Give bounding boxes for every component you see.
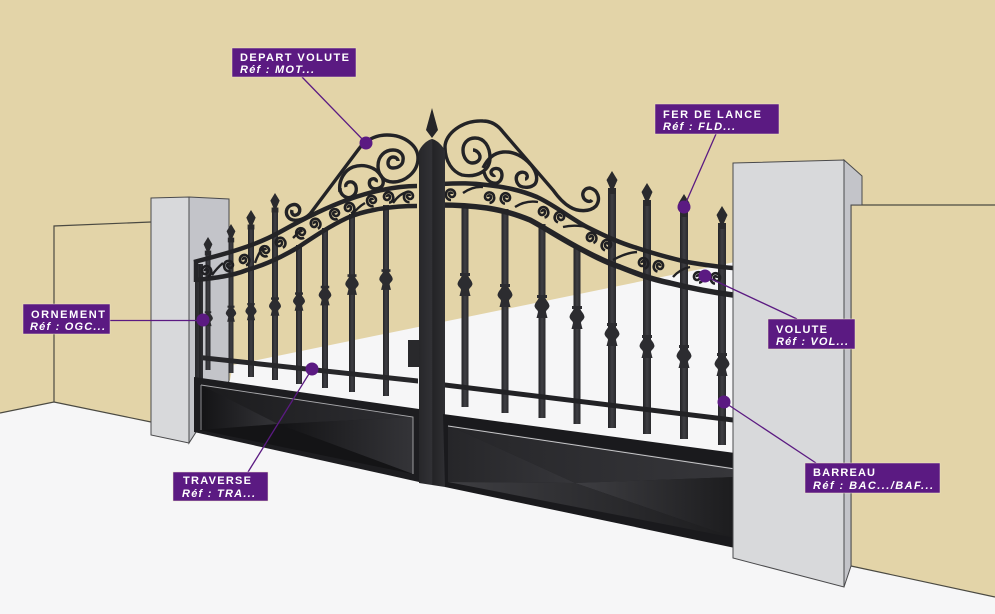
callout: barreau (718, 396, 940, 493)
callout: fer de lance (655, 104, 779, 214)
callout: depart volute: DEPART VOLUTE (240, 52, 349, 64)
callout: ornement: ORNEMENT (31, 309, 105, 321)
callout: barreau: BARREAU (813, 467, 875, 479)
callout: fer de lance: Réf : FLD... (663, 121, 735, 133)
center post (419, 139, 445, 487)
callout: ornement: Réf : OGC... (30, 321, 105, 333)
left band connectors (212, 192, 407, 275)
left bottom panel (194, 377, 419, 482)
center finial (426, 108, 438, 138)
right leaf collars (458, 273, 730, 376)
callout: ornement (23, 304, 210, 334)
right leaf spear tips (606, 171, 728, 229)
right arch band (441, 183, 733, 295)
left pillar (151, 197, 229, 443)
left arch band (194, 186, 417, 282)
right wall outline (851, 205, 995, 597)
lock box (408, 340, 419, 367)
callout: volute: VOLUTE (776, 324, 827, 336)
left wall outline (0, 222, 151, 422)
right pillar (733, 160, 862, 587)
callout: depart volute: Réf : MOT... (240, 64, 314, 76)
callout: traverse: TRAVERSE (183, 475, 251, 487)
callout: fer de lance: FER DE LANCE (663, 109, 761, 121)
right leaf bars (462, 192, 726, 445)
callout: barreau: Réf : BAC.../BAF... (813, 480, 933, 492)
ground (0, 262, 995, 614)
left leaf spear tips (204, 193, 280, 255)
left stile (195, 264, 203, 380)
callout: volute: Réf : VOL... (776, 336, 848, 348)
callout: depart volute (232, 48, 372, 150)
right traverse rail (445, 382, 733, 422)
left leaf bars (206, 205, 389, 396)
callout: traverse: Réf : TRA... (182, 488, 255, 500)
left top scroll (286, 135, 418, 220)
left band scrolls (201, 191, 414, 278)
left traverse rail (200, 355, 418, 384)
right band scrolls (446, 190, 721, 284)
callout: traverse (173, 362, 318, 501)
right top scroll (445, 121, 598, 211)
callout: volute (698, 270, 855, 349)
gate (194, 108, 735, 548)
right bottom panel (443, 414, 735, 548)
left leaf collars (203, 269, 393, 326)
right band connectors (463, 187, 690, 277)
